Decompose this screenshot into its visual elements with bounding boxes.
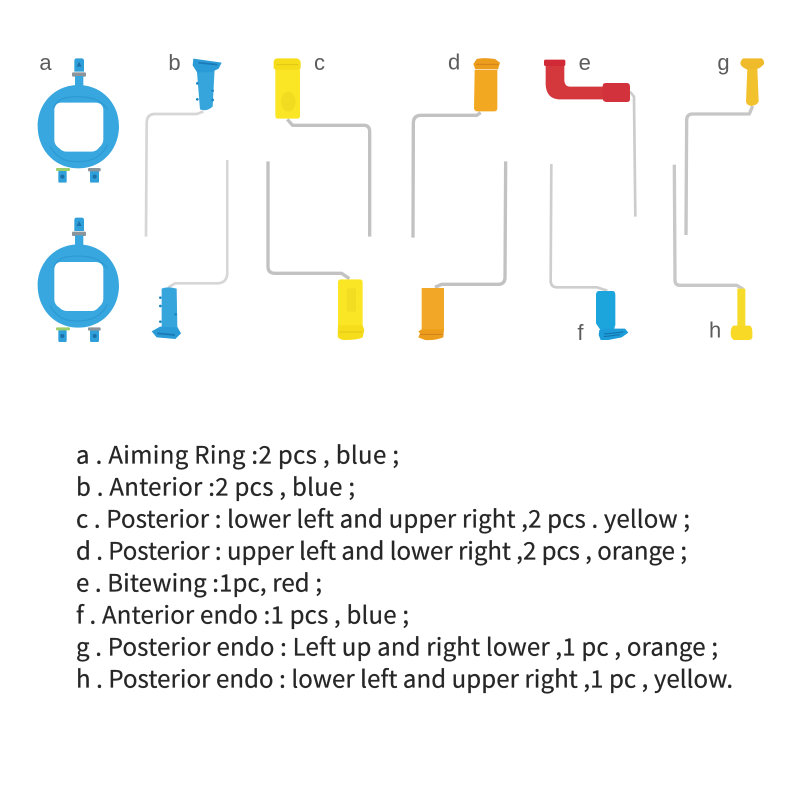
panel: a and b group (38, 50, 227, 342)
text block: parts list (76, 436, 733, 694)
icon: anterior indicator bottom (152, 160, 227, 339)
list item h: h . Posterior endo : lower left and upper right ,1 pc , yellow. (76, 660, 733, 694)
icon: posterior endo orange (686, 58, 764, 235)
list item e: e . Bitewing :1pc, red ; (76, 564, 322, 598)
list item c: c . Posterior : lower left and upper right ,2 pcs . yellow ; (76, 500, 690, 534)
icon: anterior endo blue (551, 164, 628, 340)
list item a: a . Aiming Ring :2 pcs , blue ; (76, 436, 399, 470)
panel: c and d group (268, 49, 506, 340)
list item b: b . Anterior :2 pcs , blue ; (76, 468, 355, 502)
list item f: f . Anterior endo :1 pcs , blue ; (76, 596, 409, 630)
label e: e (579, 50, 591, 75)
icon: aiming ring top (38, 58, 119, 183)
label c: c (314, 50, 325, 75)
label h: h (709, 318, 721, 343)
icon: aiming ring bottom (38, 218, 119, 342)
icon: posterior endo yellow (674, 165, 752, 340)
icon: posterior yellow bottom (268, 161, 364, 340)
list item d: d . Posterior : upper left and lower right ,2 pcs , orange ; (76, 532, 687, 566)
label b: b (168, 50, 181, 75)
label f: f (577, 320, 584, 345)
icon: posterior orange bottom (418, 161, 506, 340)
label g: g (717, 50, 730, 75)
icon: bitewing red (544, 60, 635, 217)
icon: posterior orange top (413, 58, 500, 238)
icon: anterior indicator top (146, 59, 222, 237)
list item g: g . Posterior endo : Left up and right lower ,1 pc , orange ; (76, 628, 718, 662)
panel: e, f, g and h group (544, 50, 764, 345)
label d: d (448, 49, 460, 74)
icon: posterior yellow top (274, 58, 370, 237)
label a: a (39, 50, 52, 75)
